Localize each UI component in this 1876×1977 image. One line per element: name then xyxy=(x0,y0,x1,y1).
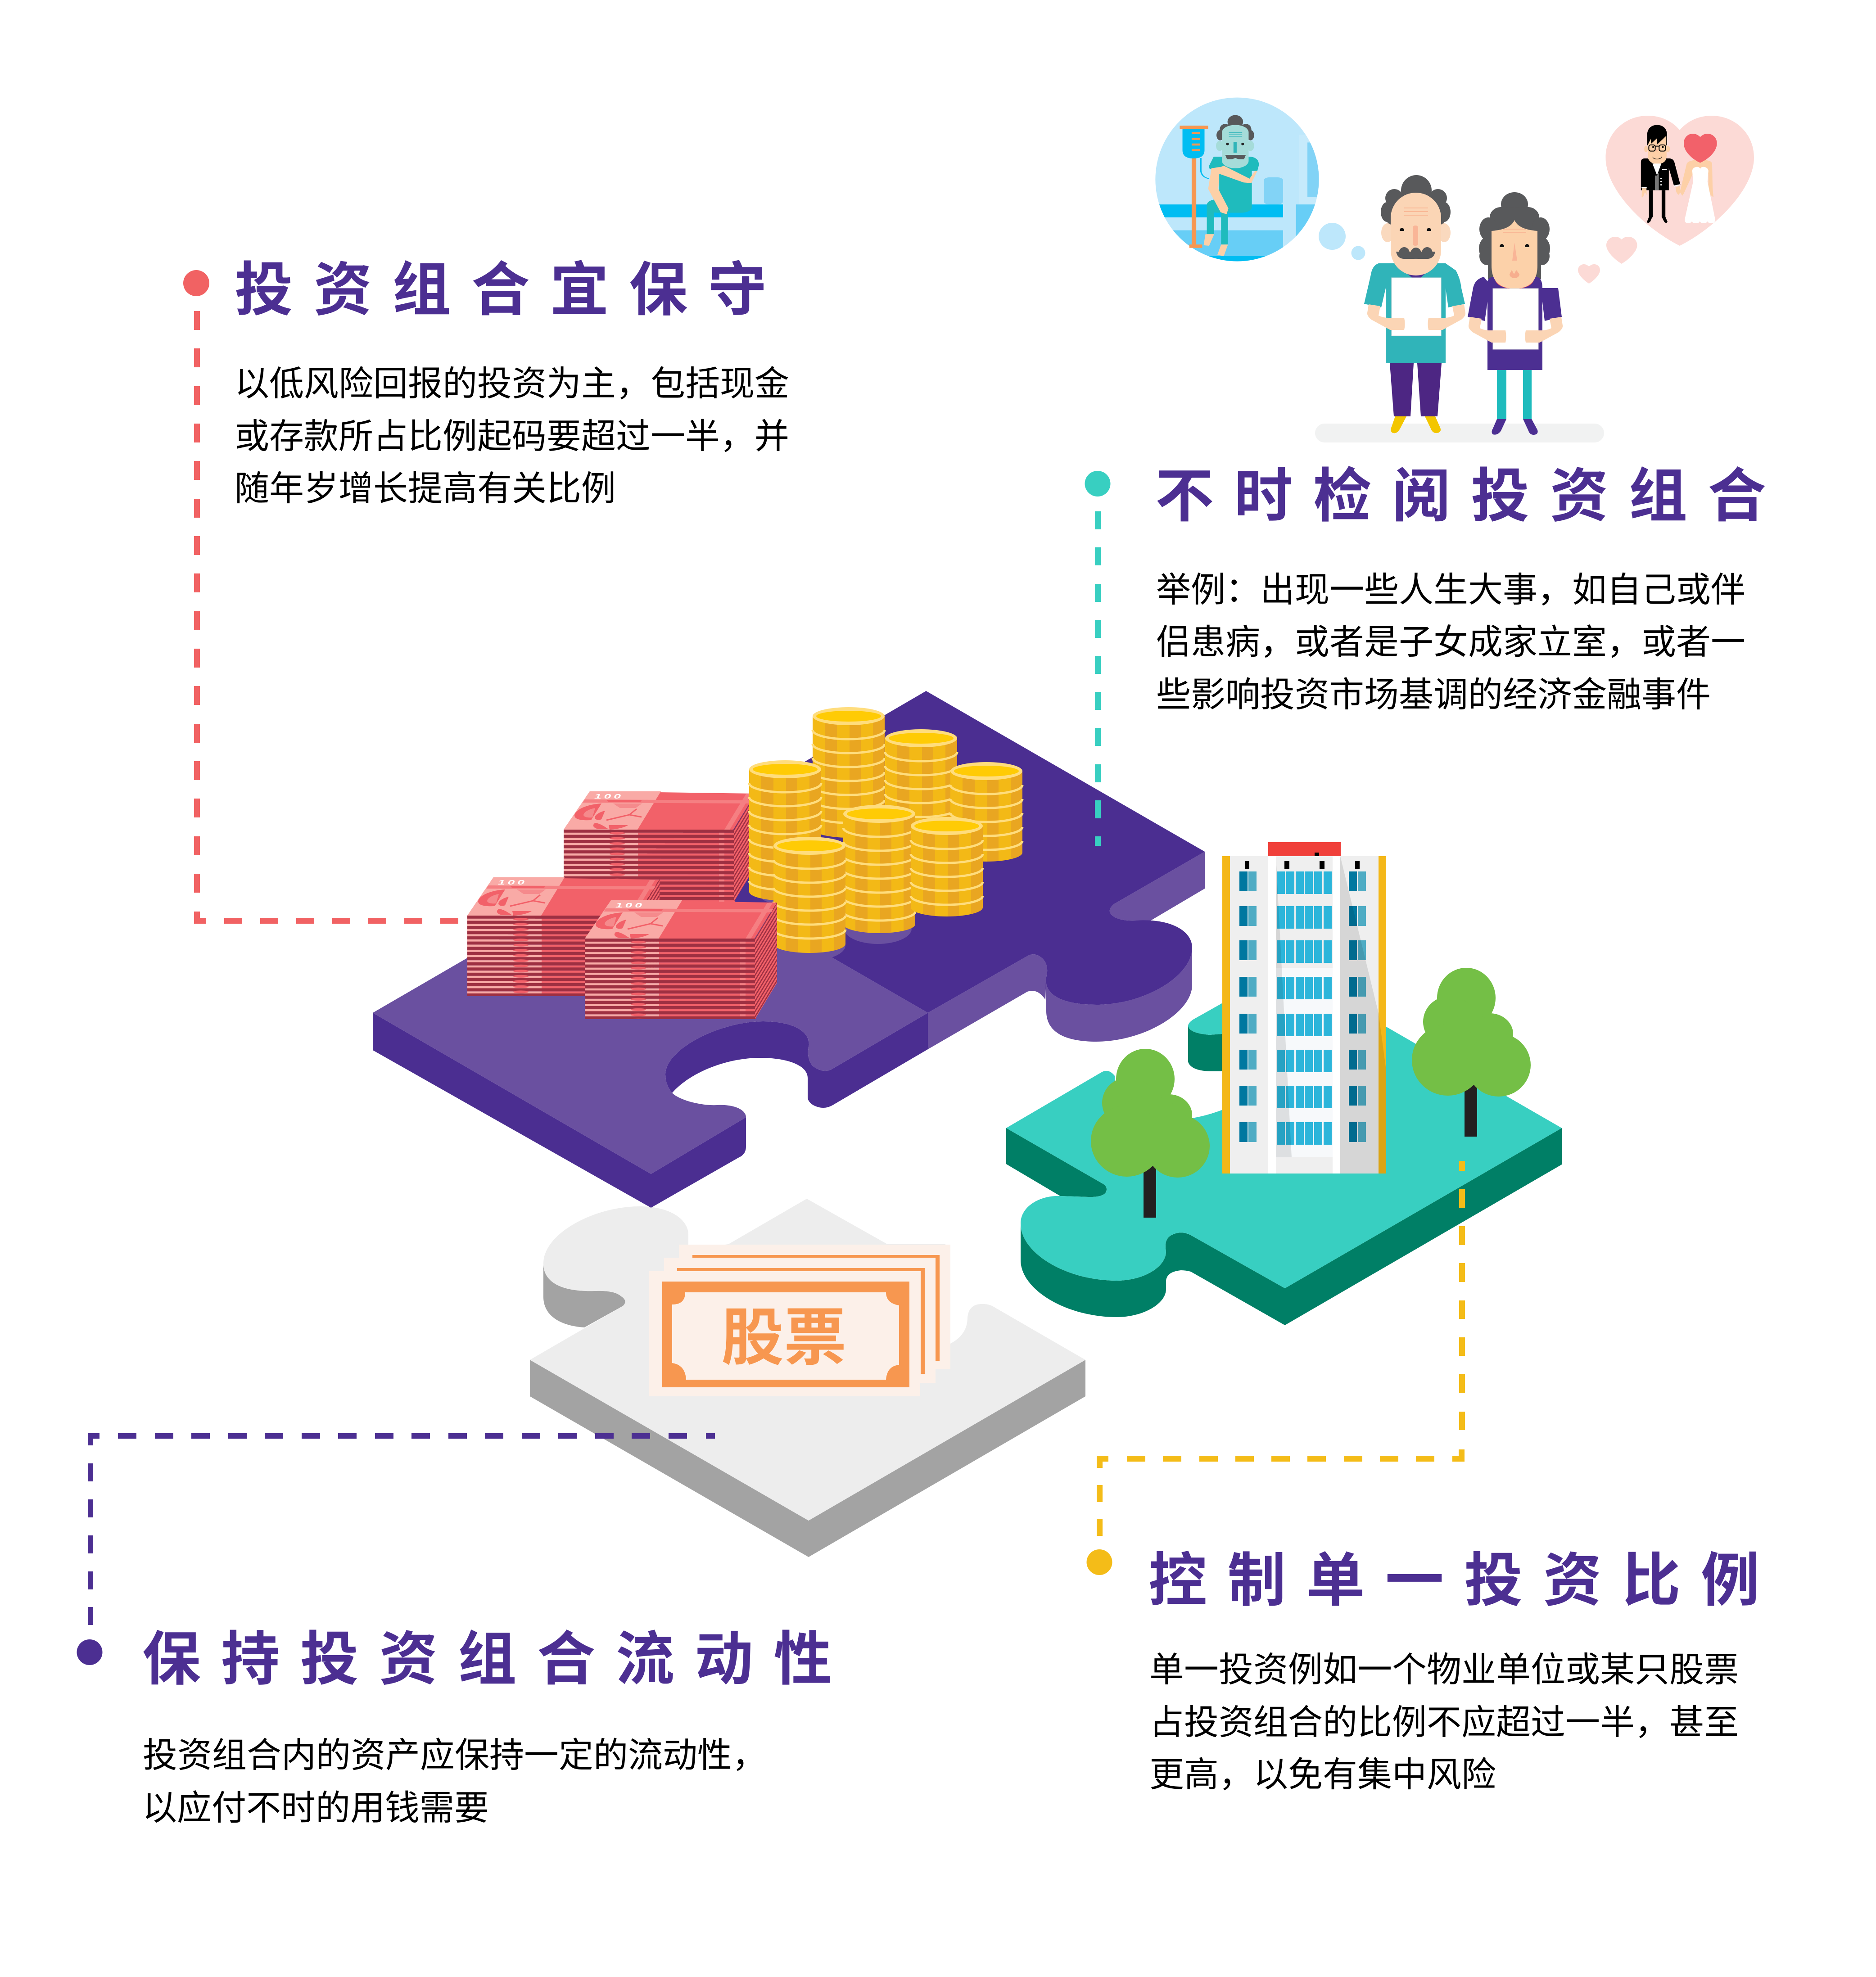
tree: right xyxy=(1412,968,1531,1137)
heart-shaped head xyxy=(1684,134,1717,163)
thought bubbles: blue xyxy=(1319,223,1365,260)
small heart bubbles xyxy=(1578,237,1637,284)
section: review portfolio regularly xyxy=(1085,463,1786,714)
body text: 些影响投资市场基调的经济金融事件 xyxy=(1156,676,1711,714)
stock label: 股票 xyxy=(721,1303,846,1373)
coin stack C xyxy=(950,762,1022,862)
ground shadow xyxy=(1315,424,1604,442)
body text xyxy=(1156,571,1745,714)
icon: old woman holding paper xyxy=(1468,192,1563,435)
body text: 单一投资例如一个物业单位或某只股票 xyxy=(1149,1651,1739,1689)
tree: left xyxy=(1091,1049,1210,1218)
body text: 随年岁增长提高有关比例 xyxy=(235,469,616,508)
body text: 投资组合内的资产应保持一定的流动性， xyxy=(143,1736,767,1775)
IV drip stand xyxy=(1180,126,1209,248)
note value: 100 xyxy=(615,901,645,909)
puzzle piece: grey (stocks) xyxy=(530,1199,1085,1557)
teal dot xyxy=(1085,471,1110,497)
purple dot xyxy=(77,1639,103,1665)
body text: 或存款所占比例起码要超过一半，并 xyxy=(235,417,789,456)
section: control single investment ratio xyxy=(1087,1548,1780,1794)
bank note stack: left xyxy=(467,877,660,996)
icon: old man holding paper xyxy=(1364,175,1465,433)
coin stacks xyxy=(749,707,1022,953)
infographic canvas xyxy=(77,97,1765,1823)
patient xyxy=(1203,115,1259,256)
window rows xyxy=(1239,871,1366,1145)
body text xyxy=(235,365,789,508)
bank note stack: back xyxy=(564,791,756,902)
body text xyxy=(142,1736,767,1828)
icon: wedding couple xyxy=(1641,125,1717,223)
body text: 更高，以免有集中风险 xyxy=(1149,1756,1496,1794)
coin stack A xyxy=(813,707,885,838)
stock certificates xyxy=(649,1245,950,1396)
dashed connector: red xyxy=(194,311,458,924)
dashed connector: yellow xyxy=(1097,1161,1465,1536)
thought bubble: hospital scene xyxy=(1155,98,1322,262)
note value: 100 xyxy=(498,878,527,886)
heading: 不时检阅投资组合 xyxy=(1155,463,1786,529)
body text: 以应付不时的用钱需要 xyxy=(142,1789,489,1828)
coin stack F xyxy=(911,817,983,916)
coin stack E xyxy=(843,805,915,933)
thought bubble: wedding heart xyxy=(1605,116,1754,246)
section: keep portfolio liquid xyxy=(77,1626,853,1828)
building xyxy=(1222,842,1386,1174)
coin stack B xyxy=(885,729,957,829)
body text: 举例：出现一些人生大事，如自己或伴 xyxy=(1156,571,1745,609)
puzzle piece: teal (property) xyxy=(1006,968,1562,1325)
body text: 侣患病，或者是子女成家立室，或者一 xyxy=(1156,623,1745,662)
section: keep portfolio conservative xyxy=(183,257,789,508)
groom xyxy=(1641,125,1681,223)
bank note stack: front xyxy=(585,900,777,1019)
heading: 保持投资组合流动性 xyxy=(142,1626,853,1692)
bride xyxy=(1680,134,1717,223)
red dot xyxy=(183,270,209,296)
note value: 100 xyxy=(594,792,624,800)
dashed connector: purple xyxy=(88,1433,715,1625)
yellow dot xyxy=(1087,1549,1112,1575)
body text: 以低风险回报的投资为主，包括现金 xyxy=(235,365,789,403)
puzzle piece: purple (cash) xyxy=(373,691,1205,1208)
heading: 投资组合宜保守 xyxy=(235,257,787,323)
coin stack G xyxy=(773,837,845,953)
dashed connector: teal xyxy=(1095,511,1101,846)
body text xyxy=(1149,1651,1739,1794)
coin stack D xyxy=(749,760,821,901)
body text: 占投资组合的比例不应超过一半，甚至 xyxy=(1149,1703,1739,1742)
heading: 控制单一投资比例 xyxy=(1148,1548,1780,1613)
